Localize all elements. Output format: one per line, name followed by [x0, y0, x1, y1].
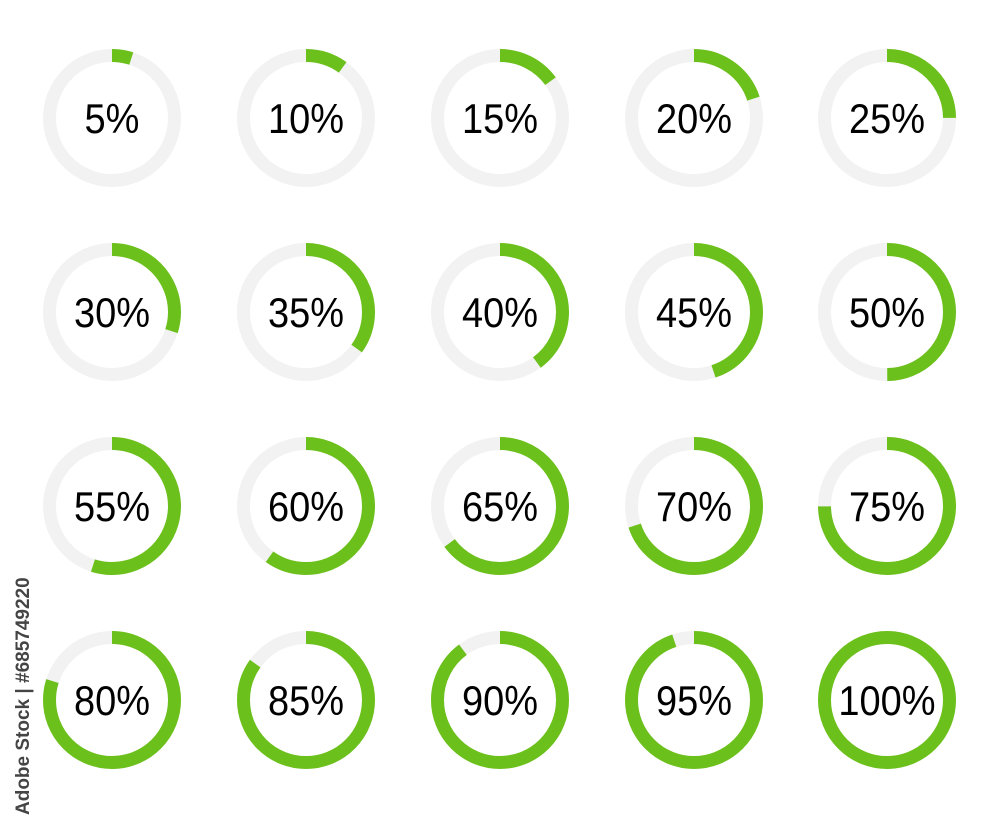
circle: 100%: 100% — [838, 678, 936, 724]
circle: 15%: 15% — [462, 96, 538, 142]
circle: 50%: 50% — [849, 290, 925, 336]
circle: 30%: 30% — [74, 290, 150, 336]
circle: 90%: 90% — [462, 678, 538, 724]
circle: 65% — [438, 444, 562, 568]
circle: 40% — [438, 250, 562, 374]
circle: 25%: 25% — [849, 96, 925, 142]
circle: 30% — [50, 250, 174, 374]
circle: 40%: 40% — [462, 290, 538, 336]
circle: 100% — [824, 638, 950, 762]
circle: 95% — [632, 638, 756, 762]
circle: 85% — [244, 638, 368, 762]
circle: 95%: 95% — [656, 678, 732, 724]
circle: 55%: 55% — [74, 484, 150, 530]
circle: 15% — [438, 56, 562, 180]
circle: 80%: 80% — [74, 678, 150, 724]
circle: 20% — [632, 56, 756, 180]
circle: 70%: 70% — [656, 484, 732, 530]
circle: 50% — [824, 250, 950, 374]
circle: 60% — [244, 444, 368, 568]
circle: 20%: 20% — [656, 96, 732, 142]
circle: 5% — [50, 56, 174, 180]
circle: 45% — [632, 250, 756, 374]
circle: 85%: 85% — [268, 678, 344, 724]
circle: 10% — [244, 56, 368, 180]
circle: 65%: 65% — [462, 484, 538, 530]
circle: 10%: 10% — [268, 96, 344, 142]
circle: 90% — [438, 638, 562, 762]
circle: 80% — [50, 638, 174, 762]
circle: 70% — [632, 444, 756, 568]
watermark text: Adobe Stock | #685749220 — [13, 577, 34, 815]
circle: 60%: 60% — [268, 484, 344, 530]
circle: 25% — [824, 56, 950, 180]
circle: 45%: 45% — [656, 290, 732, 336]
circle: 35% — [244, 250, 368, 374]
circle: 75% — [824, 444, 950, 568]
circle: 55% — [50, 444, 174, 568]
circle: 5%: 5% — [85, 96, 139, 142]
circle: 75%: 75% — [849, 484, 925, 530]
circle: 35%: 35% — [268, 290, 344, 336]
